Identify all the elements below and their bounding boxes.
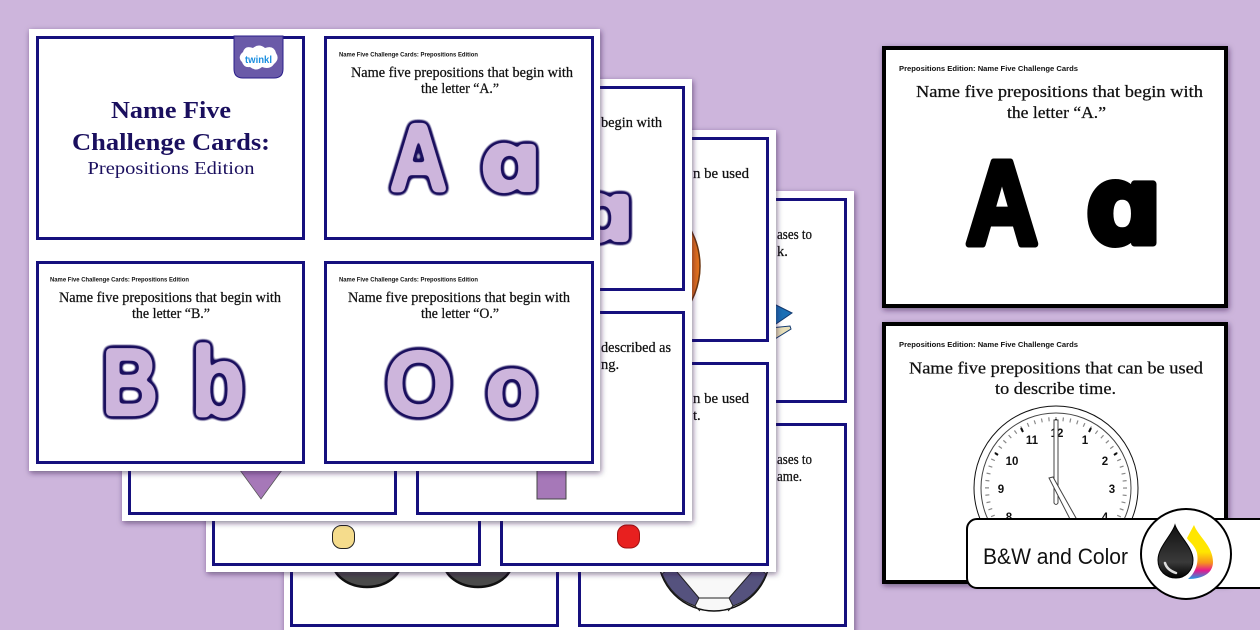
sheet 2: card sheet: described as — [601, 340, 671, 356]
icon: clock: 12 — [1051, 428, 1063, 440]
icon: purple triangle — [237, 466, 285, 499]
sheet 4: back card sheet: ases to — [777, 227, 812, 243]
black and white card: time: to describe time. — [995, 379, 1116, 398]
sheet 3: card sheet: n be used — [693, 391, 750, 407]
card: letter B: B — [102, 329, 158, 436]
icon: soccer ball — [658, 499, 770, 611]
sheet 1: front card sheet — [29, 29, 600, 471]
card: letter A: Name five prepositions that begin with — [351, 65, 574, 81]
icon: clock: 10 — [1006, 456, 1018, 468]
black and white card: time — [884, 324, 1226, 582]
icon: clock: 1 — [1082, 435, 1089, 447]
black and white card: letter A: Name five prepositions that begin with — [916, 82, 1204, 101]
icon: ink drops — [1141, 509, 1231, 599]
card: letter A — [326, 38, 592, 238]
card: letter A: A — [389, 103, 448, 212]
icon: red blob — [618, 525, 640, 548]
sheet 4: back card sheet: k. — [777, 244, 788, 260]
sheet 3: card sheet: t. — [693, 408, 701, 424]
logo: twinkl — [234, 36, 283, 78]
card: letter O: Name Five Challenge Cards: Prepositions Edition — [339, 276, 478, 284]
sheet 3: card sheet — [206, 130, 776, 572]
card: letter O — [326, 262, 592, 462]
black and white card: letter A: the letter “A.” — [1007, 103, 1106, 122]
big letter a on sheet 2: ɑ — [573, 163, 635, 261]
heading: Prepositions Edition — [88, 158, 254, 178]
card: letter B: Name Five Challenge Cards: Prepositions Edition — [50, 276, 189, 284]
black and white card: time: Prepositions Edition: Name Five Challenge Cards — [899, 342, 1078, 349]
icon: yellow blob — [332, 526, 354, 548]
heading: Challenge Cards: — [72, 130, 270, 156]
card: letter O: O — [385, 333, 453, 435]
card: letter B: Name five prepositions that begin with — [59, 290, 282, 306]
icon: clock: 8 — [1006, 512, 1013, 524]
badge: B&W and Color — [967, 509, 1260, 599]
black and white card: letter A: Prepositions Edition: Name Five Challenge Cards — [899, 66, 1078, 73]
card: title — [38, 36, 304, 238]
card: letter A: Name Five Challenge Cards: Prepositions Edition — [339, 52, 478, 58]
card: letter B: the letter “B.” — [132, 306, 210, 322]
logo: twinkl: twinkl — [245, 55, 272, 66]
icon: clock: 3 — [1109, 484, 1115, 496]
icon: clock — [974, 406, 1138, 570]
card: letter O: o — [486, 339, 538, 435]
black and white card: letter A — [884, 48, 1226, 306]
sheet 2: card sheet: ng. — [601, 357, 619, 373]
black and white card: time: Name five prepositions that can be used — [909, 358, 1204, 378]
heading: Name Five — [111, 98, 231, 124]
icon: clock: 11 — [1026, 435, 1039, 447]
card: letter A: the letter “A.” — [421, 81, 499, 97]
card: letter B: b — [191, 326, 245, 438]
sheet 4: back card sheet: ame. — [777, 469, 802, 485]
black and white card: letter A: ɑ — [1086, 144, 1162, 269]
sheet 2: card sheet — [122, 79, 692, 521]
icon: clock: 4 — [1102, 512, 1109, 524]
icon: orange ball — [548, 190, 700, 342]
sheet 4: back card sheet — [284, 191, 854, 630]
icon: clock: 2 — [1102, 456, 1108, 468]
sheet 2: card sheet: begin with — [601, 115, 663, 131]
card: letter B — [38, 262, 304, 462]
icon: black letter shapes — [333, 537, 512, 587]
card: letter O: Name five prepositions that begin with — [348, 290, 571, 306]
black and white card: letter A: A — [966, 137, 1038, 270]
icon: blue book — [770, 302, 792, 342]
card: letter O: the letter “O.” — [421, 306, 499, 322]
icon: clock: 9 — [998, 484, 1004, 496]
sheet 3: card sheet: n be used — [693, 166, 750, 182]
card: letter A: ɑ — [480, 113, 542, 211]
badge: B&W and Color: B&W and Color — [983, 544, 1128, 569]
heading — [72, 98, 270, 178]
icon: purple square — [537, 466, 566, 499]
sheet 4: back card sheet: ases to — [777, 452, 812, 468]
